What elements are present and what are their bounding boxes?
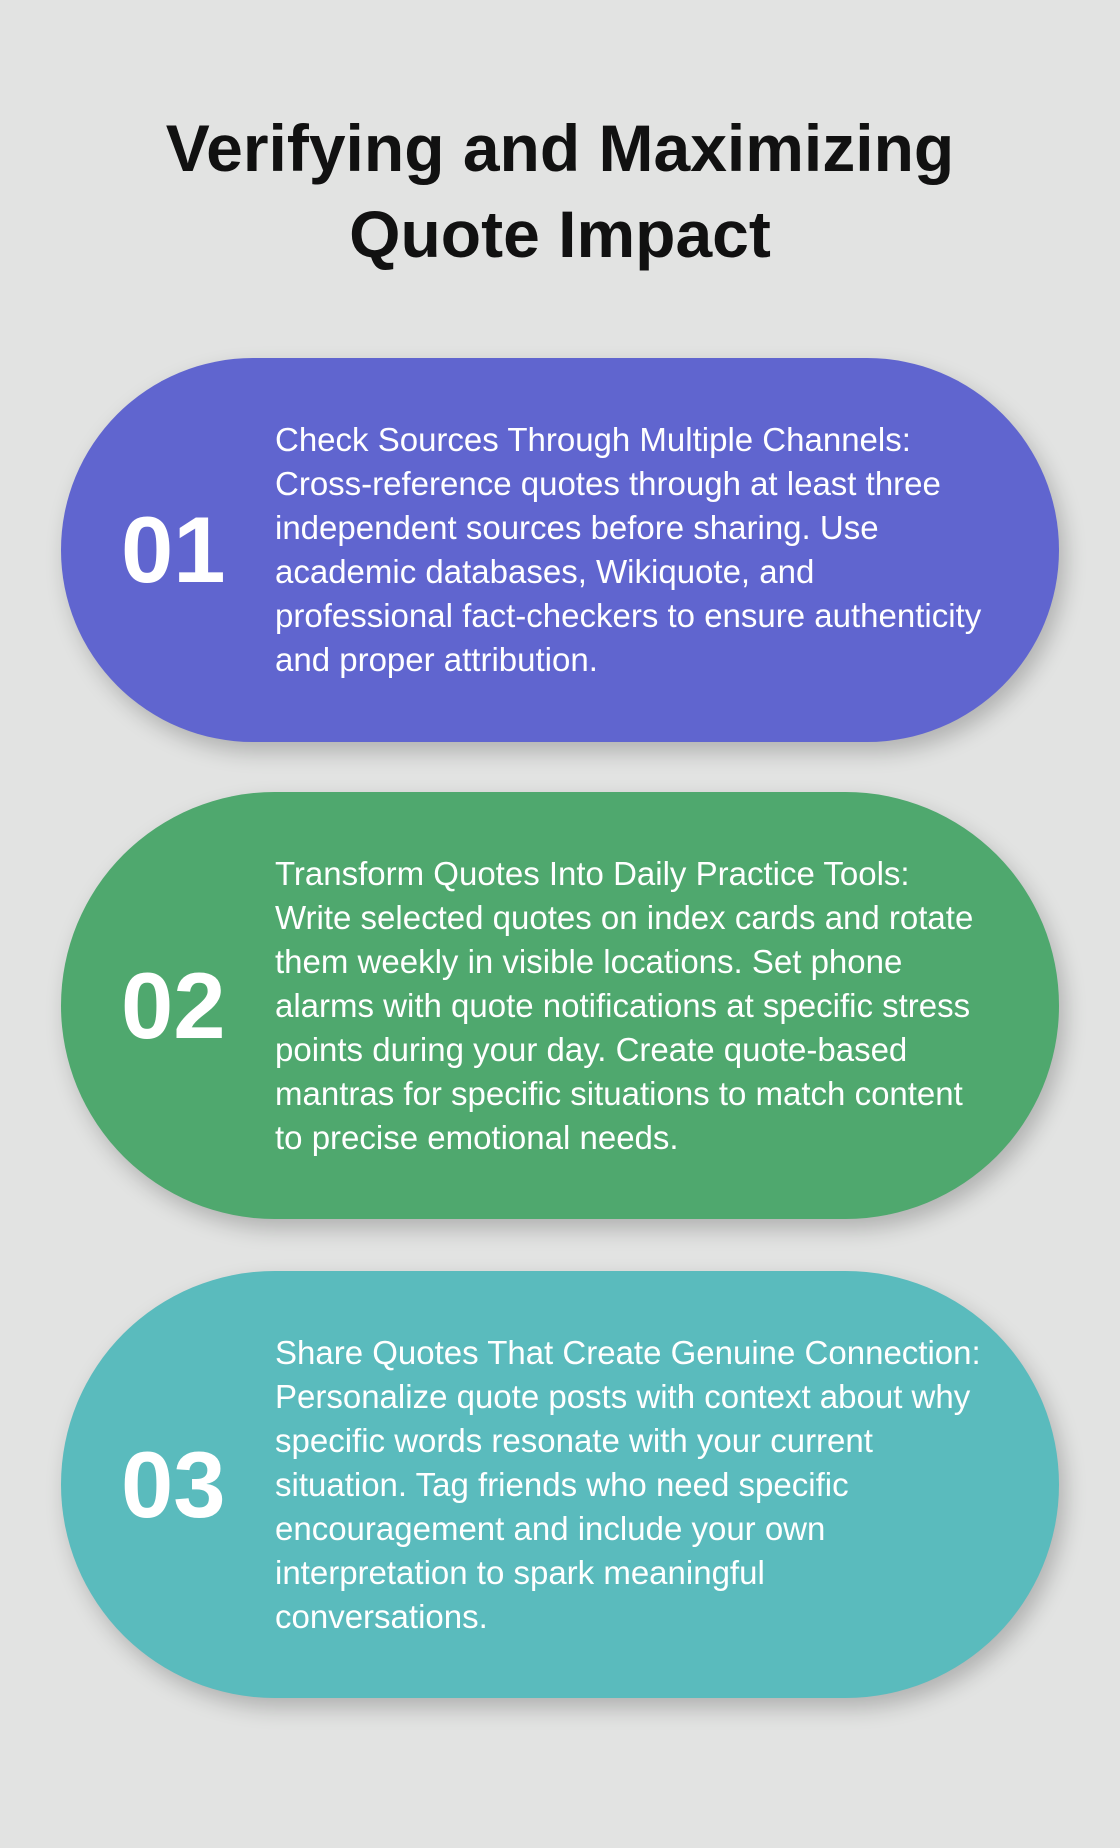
text block 02: mantras for specific situations to match content xyxy=(275,1074,963,1112)
text block 03: specific words resonate with your current xyxy=(275,1422,873,1458)
panel: step 03 xyxy=(61,1271,1059,1698)
text block 01: academic databases, Wikiquote, and xyxy=(275,553,814,590)
text block 01: independent sources before sharing. Use xyxy=(275,509,879,546)
text block 03: encouragement and include your own xyxy=(275,1510,825,1546)
number 02: 02 xyxy=(121,952,226,1058)
number 03: 03 xyxy=(121,1432,226,1536)
text block 03: situation. Tag friends who need specific xyxy=(275,1466,849,1502)
text block 01: professional fact-checkers to ensure authenticity xyxy=(275,597,981,634)
title xyxy=(166,111,954,271)
text block 03: Personalize quote posts with context about why xyxy=(275,1378,970,1414)
text block 02: alarms with quote notifications at specific stress xyxy=(275,986,970,1024)
text block 01: and proper attribution. xyxy=(275,641,598,678)
text block 02: Write selected quotes on index cards and rotate xyxy=(275,898,973,936)
text block 02: them weekly in visible locations. Set phone xyxy=(275,942,902,980)
text block 02: Transform Quotes Into Daily Practice Tools: xyxy=(275,854,910,892)
text block 01 xyxy=(275,421,982,678)
panel: step 01 xyxy=(61,358,1059,742)
text block 03 xyxy=(275,1334,981,1634)
text block 02 xyxy=(275,854,973,1156)
panel: step 02 xyxy=(61,792,1059,1219)
text block 02: to precise emotional needs. xyxy=(275,1118,679,1156)
title: Quote Impact xyxy=(349,197,771,271)
title: Verifying and Maximizing xyxy=(166,111,954,185)
text block 02: points during your day. Create quote-based xyxy=(275,1030,907,1068)
text block 03: interpretation to spark meaningful xyxy=(275,1554,765,1590)
text block 01: Cross-reference quotes through at least three xyxy=(275,465,941,502)
text block 03: Share Quotes That Create Genuine Connection: xyxy=(275,1334,981,1370)
number 01: 01 xyxy=(121,497,226,602)
text block 01: Check Sources Through Multiple Channels: xyxy=(275,421,911,458)
text block 03: conversations. xyxy=(275,1598,488,1634)
